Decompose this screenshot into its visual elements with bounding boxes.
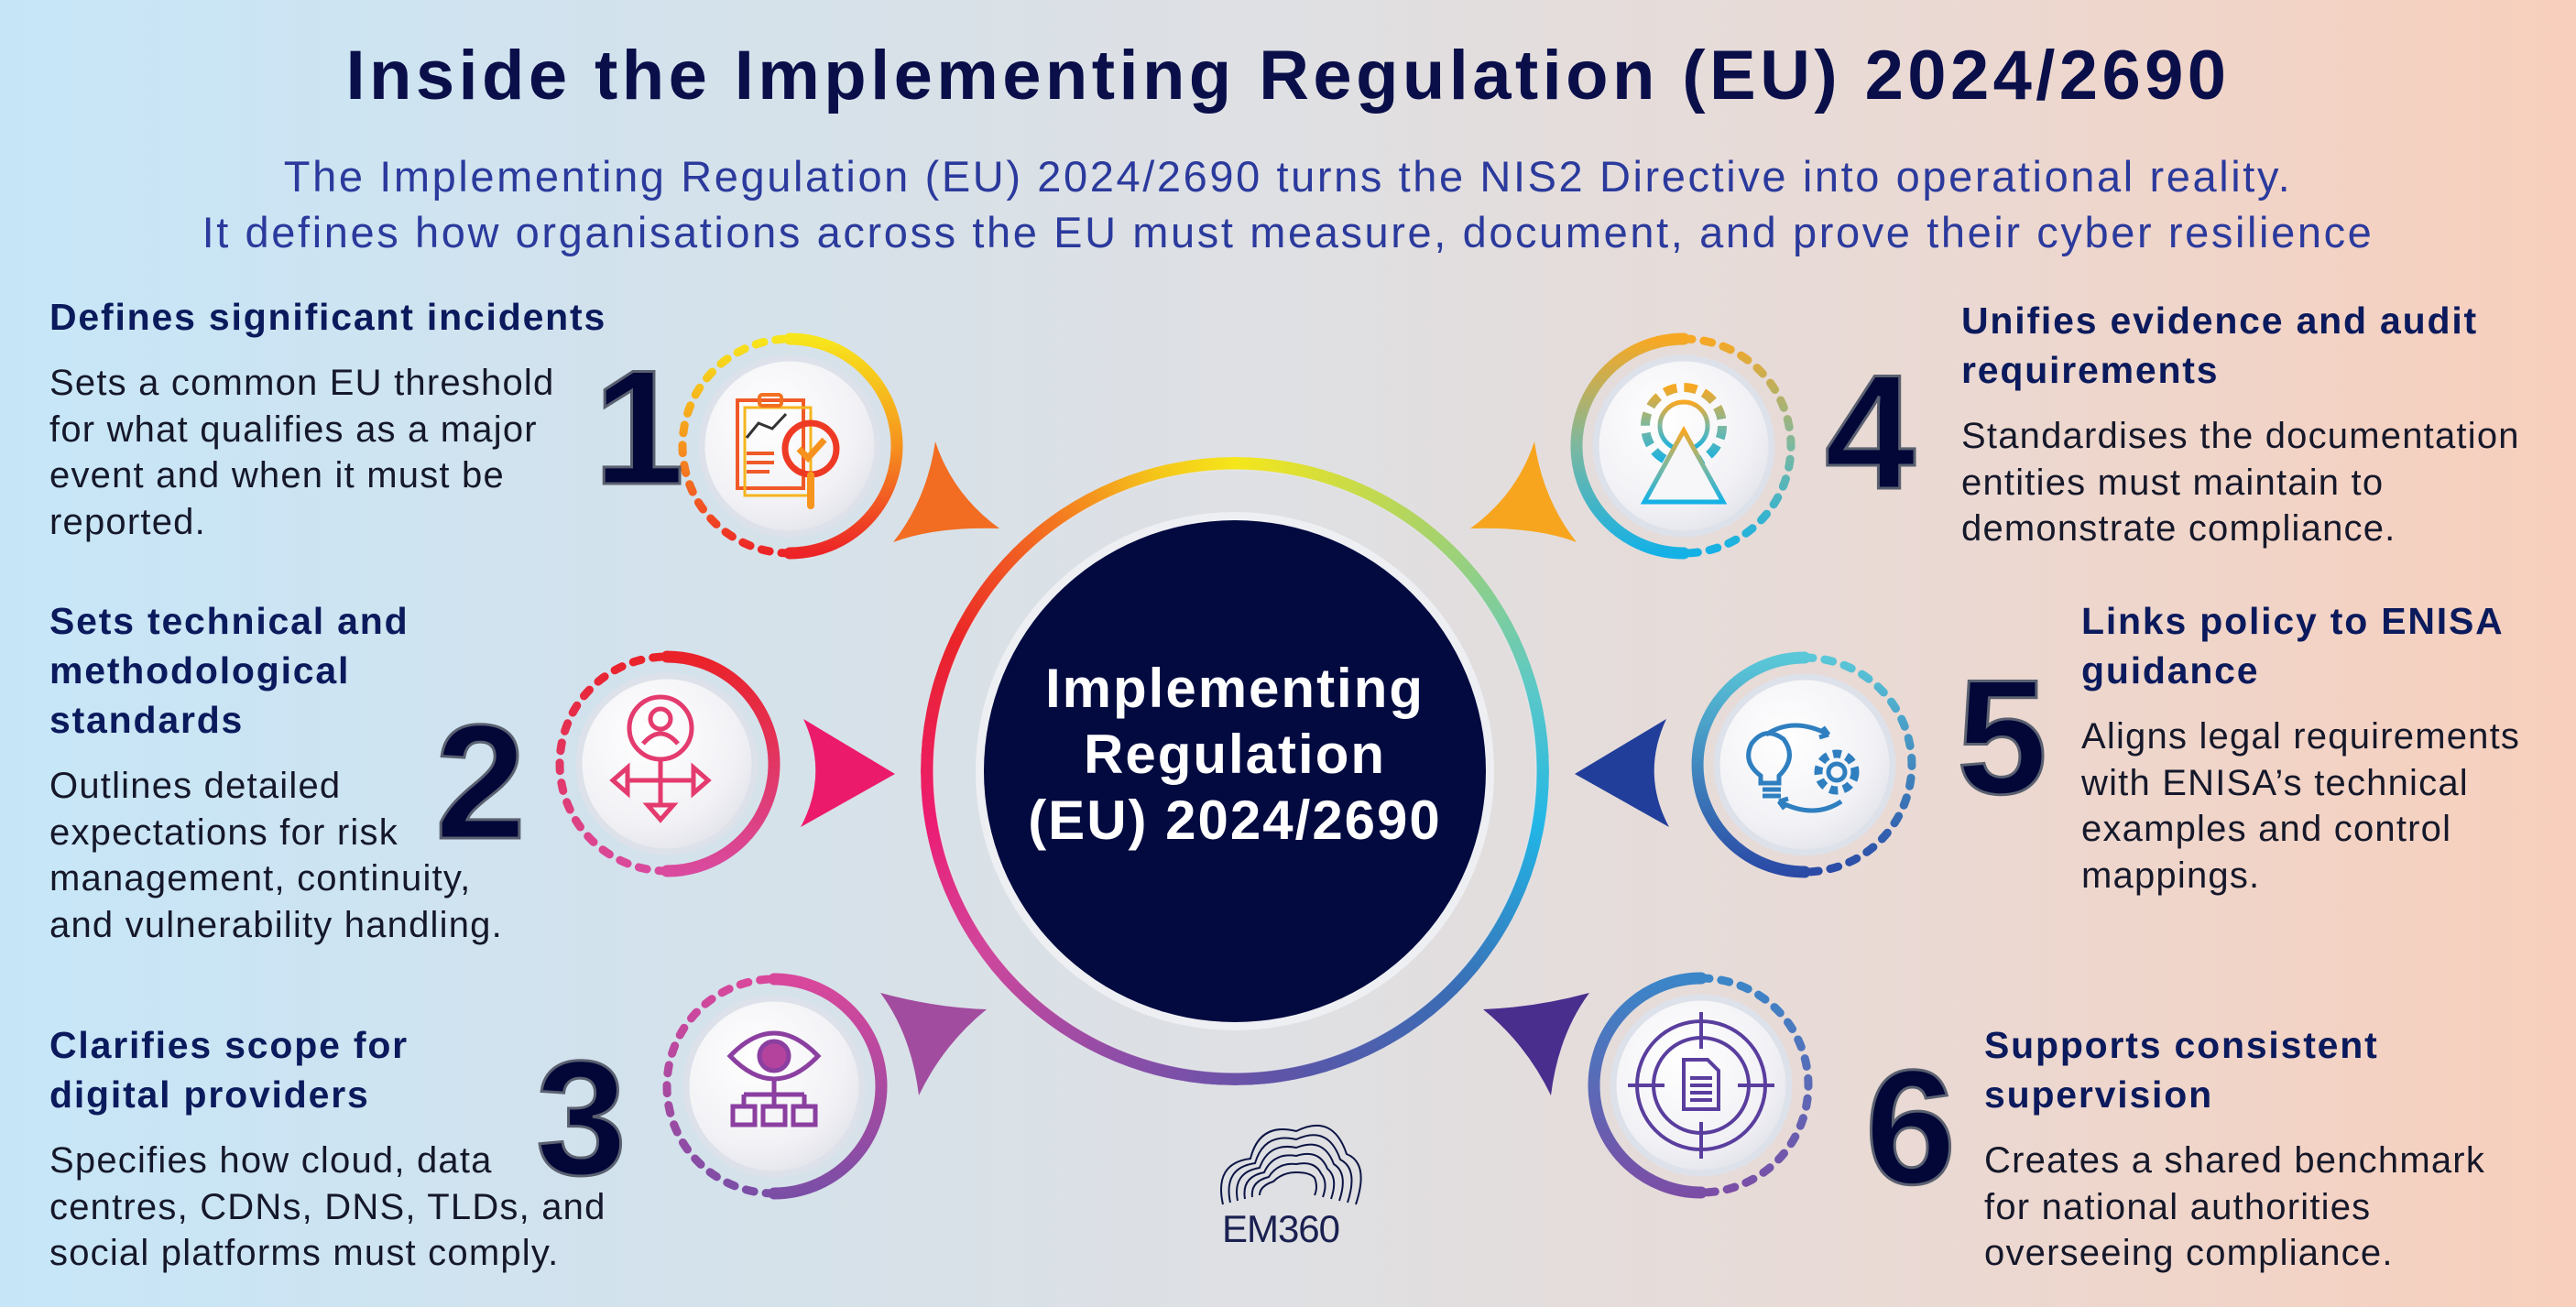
block 6: overseeing compliance. [1984, 1233, 2394, 1273]
block 5: with ENISA’s technical [2081, 762, 2469, 802]
block 1: reported. [49, 502, 206, 542]
block 5: mappings. [2081, 855, 2260, 896]
central hub [921, 457, 1549, 1085]
block 3: social platforms must comply. [49, 1233, 559, 1273]
block 1: for what qualifies as a major [49, 408, 538, 449]
arrow 3 [880, 993, 987, 1095]
center text: Regulation [1084, 724, 1386, 785]
icon 2: person with arrows [560, 657, 774, 871]
block 2: methodological [49, 649, 350, 692]
block 5: Links policy to ENISA [2081, 600, 2505, 642]
block 5 [2081, 600, 2520, 896]
block 2 [49, 600, 503, 945]
center text: (EU) 2024/2690 [1028, 790, 1442, 851]
number 5: 5 [1957, 646, 2047, 828]
arrow 5 [1575, 719, 1669, 827]
block 1: Defines significant incidents [49, 296, 606, 338]
block 4: demonstrate compliance. [1961, 508, 2396, 549]
arrow 2 [801, 719, 895, 827]
center text: Implementing [1045, 658, 1424, 719]
block 1 [49, 296, 606, 542]
subtitle: The Implementing Regulation (EU) 2024/2690 turns the NIS2 Directive into operational reality. [284, 152, 2292, 201]
block 2: Sets technical and [49, 600, 409, 642]
block 4: Standardises the documentation [1961, 416, 2520, 456]
block 6: for national authorities [1984, 1187, 2371, 1227]
block 1: Sets a common EU threshold [49, 363, 554, 403]
center text [1028, 658, 1442, 851]
block 2: and vulnerability handling. [49, 905, 503, 945]
block 1: event and when it must be [49, 455, 505, 496]
block 4: requirements [1961, 349, 2219, 391]
block 4: entities must maintain to [1961, 462, 2384, 502]
arrow 4 [1470, 441, 1577, 542]
icon 3: eye with hierarchy [667, 979, 881, 1193]
block 4 [1961, 300, 2520, 549]
block 2: expectations for risk [49, 811, 398, 852]
number 1: 1 [594, 336, 684, 518]
block 6: supervision [1984, 1073, 2213, 1116]
title: Inside the Implementing Regulation (EU) 2024/2690 [346, 37, 2230, 114]
icon 6: target with document [1594, 978, 1808, 1193]
block 4: Unifies evidence and audit [1961, 300, 2478, 342]
logo text: EM360 [1222, 1207, 1339, 1250]
arrow 1 [893, 441, 999, 542]
arrow 6 [1483, 993, 1589, 1095]
block 3: Specifies how cloud, data [49, 1140, 493, 1181]
block 3: digital providers [49, 1073, 370, 1116]
block 2: Outlines detailed [49, 766, 341, 806]
block 2: management, continuity, [49, 858, 471, 899]
icon 4: gear with warning [1577, 339, 1791, 553]
block 6: Supports consistent [1984, 1024, 2379, 1066]
number 6: 6 [1865, 1036, 1956, 1218]
number 4: 4 [1825, 341, 1916, 523]
graphics [555, 333, 1916, 1205]
block 5: Aligns legal requirements [2081, 716, 2520, 757]
icon 5: bulb and gear cycle [1697, 658, 1912, 872]
number 3: 3 [536, 1027, 627, 1209]
icon 1: clipboard with magnifier [682, 339, 897, 553]
block 5: guidance [2081, 649, 2259, 692]
number 2: 2 [435, 691, 526, 873]
logo: EM360 cloud [1221, 1126, 1361, 1204]
subtitle [202, 152, 2374, 256]
block 2: standards [49, 699, 244, 741]
block 3: centres, CDNs, DNS, TLDs, and [49, 1187, 606, 1227]
block 3 [49, 1024, 606, 1273]
subtitle: It defines how organisations across the EU must measure, document, and prove their cyber resilience [202, 208, 2374, 256]
block 6: Creates a shared benchmark [1984, 1140, 2485, 1181]
block 3: Clarifies scope for [49, 1024, 409, 1066]
block 6 [1984, 1024, 2485, 1273]
block 5: examples and control [2081, 809, 2451, 849]
